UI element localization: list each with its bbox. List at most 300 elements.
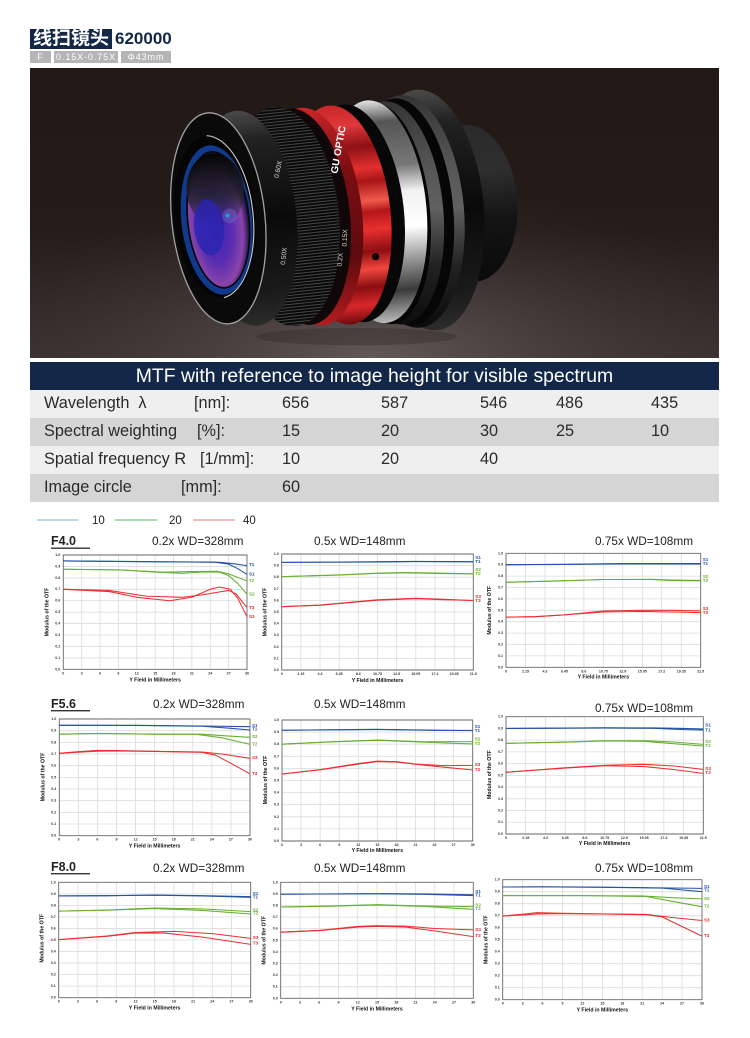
chart: F4.0 0.2x: 12 — [135, 671, 139, 675]
chart: F8.0 0.75x: 12 — [580, 1002, 584, 1006]
table header — [30, 362, 719, 390]
chart: F8.0 0.2x: Modulus of the OTF — [40, 914, 46, 963]
chart: F4.0 0.5x: 6.45 — [336, 672, 343, 676]
heading: F5.6: F5.6 — [51, 697, 76, 711]
chart: F4.0 0.2x: 15 — [153, 671, 157, 675]
chart: F8.0 0.75x: 1.0 — [495, 878, 500, 882]
chart: F4.0 0.5x: T2 — [475, 571, 481, 576]
chart: F5.6 0.5x: 1.0 — [274, 718, 279, 722]
chart: F8.0 0.5x: 0.1 — [273, 985, 278, 989]
chart: F8.0 0.2x: S2 — [253, 908, 259, 913]
chart: F5.6 0.5x: 0.4 — [274, 791, 279, 795]
chart: F5.6 0.2x: 9 — [116, 838, 118, 842]
chart: F5.6 0.2x: 0.9 — [51, 729, 56, 733]
chart: F4.0 0.2x — [44, 553, 255, 683]
chart: F5.6 0.75x: 15.05 — [640, 836, 649, 840]
chart: F4.0 0.75x: 0.3 — [498, 631, 503, 635]
chart: F4.0 0.2x: 6 — [99, 671, 101, 675]
chart: F5.6 0.75x: T2 — [705, 743, 711, 748]
chart: F4.0 0.5x: 0.6 — [274, 598, 279, 602]
chart: F4.0 0.75x: 8.6 — [581, 669, 586, 673]
inner bezel — [166, 131, 264, 302]
chart: F4.0 0.75x: 0.8 — [498, 574, 503, 578]
chart: F5.6 0.2x: Modulus of the OTF — [40, 753, 46, 801]
table: MTF conditions — [30, 362, 719, 502]
row: spatial frequency: 40 — [480, 450, 498, 468]
chart: F8.0 0.5x: 0.6 — [273, 927, 278, 931]
row: spectral weighting — [30, 418, 719, 446]
chart: F5.6 0.5x: 6 — [319, 843, 321, 847]
chart: F5.6 0.5x: 9 — [338, 843, 340, 847]
row: wavelength: [nm]: — [194, 394, 230, 412]
chart: F8.0 0.2x: 30 — [249, 1000, 253, 1004]
chart: F8.0 0.5x: T1 — [475, 892, 481, 897]
chart: F8.0 0.75x: 30 — [700, 1002, 704, 1006]
chart: F4.0 0.5x: 8.6 — [356, 672, 361, 676]
row: spectral weighting: 25 — [556, 422, 574, 440]
chart: F8.0 0.5x: Modulus of the OTF — [262, 916, 268, 965]
chart: F4.0 0.2x: 0.1 — [55, 656, 60, 660]
chart: F5.6 0.75x: 1.0 — [498, 715, 503, 719]
lens shadow — [257, 328, 457, 345]
chart: F5.6 0.2x: 27 — [229, 838, 233, 842]
chart: F4.0 0.75x: 0.5 — [498, 608, 503, 612]
chart: F8.0 0.75x: 6 — [542, 1002, 544, 1006]
chart: F4.0 0.75x: 12.9 — [619, 669, 626, 673]
chart: F8.0 0.75x: T2 — [704, 903, 710, 908]
row: spectral weighting: 15 — [282, 422, 300, 440]
chart title: row 1 col 1: 0.2x WD=328mm — [152, 534, 244, 548]
chart: F5.6 0.75x: 0.7 — [498, 750, 503, 754]
chart: F5.6 0.2x: 0.8 — [51, 740, 56, 744]
rear flange — [326, 85, 494, 338]
chart: F5.6 0.2x: 0.5 — [51, 775, 56, 779]
chart: F5.6 0.75x: 0.8 — [498, 738, 503, 742]
chart: F8.0 0.5x: 1.0 — [273, 880, 278, 884]
heading: F4.0: F4.0 — [51, 534, 76, 548]
row: wavelength: 546 — [480, 394, 507, 412]
chart: F8.0 0.5x: 0 — [280, 1000, 282, 1004]
black gap ring — [293, 99, 415, 327]
chart: F4.0 0.2x: 0.7 — [55, 587, 60, 591]
row: wavelength — [30, 390, 719, 418]
chart: F4.0 0.75x: 4.3 — [542, 669, 547, 673]
chart: F8.0 0.5x: 9 — [337, 1000, 339, 1004]
chart: F4.0 0.5x: 0.7 — [274, 587, 279, 591]
chart: F5.6 0.5x: 0.5 — [274, 778, 279, 782]
chart: F4.0 0.5x: Modulus of the OTF — [263, 588, 269, 636]
chart: F4.0 0.5x: S1 — [475, 555, 481, 560]
chart: F5.6 0.5x: T1 — [475, 728, 481, 733]
tag: mount: F — [37, 52, 44, 62]
chart: F8.0 0.75x: 0 — [502, 1002, 504, 1006]
chart: F5.6 0.2x: T2 — [252, 742, 258, 747]
row: spectral weighting: [%]: — [197, 422, 225, 440]
chart: F8.0 0.5x — [262, 880, 481, 1012]
chart: F5.6 0.2x: Y Field in Millimeters — [129, 844, 181, 850]
row: spectral weighting: 30 — [480, 422, 498, 440]
chart: F4.0 0.75x: S1 — [703, 557, 709, 562]
chart: F4.0 0.2x: 0.8 — [55, 576, 60, 580]
chart: F5.6 0.5x: 30 — [471, 843, 475, 847]
chart: F5.6 0.5x: 18 — [394, 843, 398, 847]
chart: F4.0 0.2x: 9 — [117, 671, 119, 675]
chart: F8.0 0.75x: 0.4 — [495, 950, 500, 954]
chart: F8.0 0.2x: 18 — [172, 1000, 176, 1004]
chart: F5.6 0.2x: 0.3 — [51, 799, 56, 803]
chart title: row 1 col 3: 0.75x WD=108mm — [595, 534, 693, 548]
tag: diameter — [121, 51, 171, 63]
row: spatial frequency: Spatial frequency R — [44, 450, 186, 468]
chart: F4.0 0.2x: S1 — [249, 572, 255, 577]
chart: F8.0 0.75x: 0.3 — [495, 962, 500, 966]
silver ring — [317, 96, 436, 327]
chart: F5.6 0.5x: 0.2 — [274, 815, 279, 819]
chart: F4.0 0.5x: 4.3 — [318, 672, 323, 676]
chart: F4.0 0.2x: 21 — [190, 671, 194, 675]
chart: F4.0 0.5x: 0.2 — [274, 645, 279, 649]
chart: F8.0 0.5x: S3 — [475, 927, 481, 932]
chart: F4.0 0.5x: S3 — [475, 594, 481, 599]
chart: F8.0 0.75x: 9 — [561, 1002, 563, 1006]
chart: F5.6 0.5x: 12 — [356, 843, 360, 847]
row: image circle: [mm]: — [181, 478, 222, 496]
chart title: row 3 col 2: 0.5x WD=148mm — [314, 861, 406, 875]
legend — [37, 515, 256, 527]
chart: F5.6 0.2x: 15 — [153, 838, 157, 842]
chart: F4.0 0.5x: 0.0 — [274, 668, 279, 672]
chart: F5.6 0.2x: 18 — [172, 838, 176, 842]
chart: F4.0 0.5x: 1.0 — [274, 552, 279, 556]
chart: F8.0 0.5x: 3 — [299, 1000, 301, 1004]
chart: F4.0 0.5x: 12.9 — [393, 672, 400, 676]
row: spatial frequency: 10 — [282, 450, 300, 468]
chart: F5.6 0.75x: 21.5 — [700, 836, 707, 840]
chart: F8.0 0.2x — [40, 880, 259, 1012]
chart: F5.6 0.5x — [263, 718, 481, 854]
chart: F5.6 0.75x: 6.45 — [562, 836, 569, 840]
chart: F5.6 0.2x: 0 — [58, 838, 60, 842]
chart: F8.0 0.2x: 0.5 — [51, 938, 56, 942]
engraved scale marks: 0.15X — [342, 229, 349, 247]
chart: F8.0 0.2x: 0.9 — [51, 892, 56, 896]
chart: F4.0 0.2x: 0.4 — [55, 622, 60, 626]
chart: F4.0 0.2x: 24 — [208, 671, 212, 675]
chart: F8.0 0.2x: 0.8 — [51, 903, 56, 907]
heading: F4.0 — [51, 534, 90, 549]
chart: F4.0 0.75x: 0.0 — [498, 665, 503, 669]
chart: F5.6 0.2x: 24 — [210, 838, 214, 842]
tag: diameter: Φ43mm — [128, 52, 164, 62]
lens glass — [174, 142, 260, 298]
chart: F4.0 0.5x: 17.2 — [431, 672, 438, 676]
chart: F4.0 0.5x: 0.4 — [274, 622, 279, 626]
chart: F8.0 0.2x: 27 — [230, 1000, 234, 1004]
chart: F4.0 0.75x: Modulus of the OTF — [487, 586, 493, 635]
chart: F8.0 0.5x: Y Field in Millimeters — [351, 1006, 403, 1012]
chart: F8.0 0.5x: 18 — [394, 1000, 398, 1004]
chart: F8.0 0.5x: 27 — [452, 1000, 456, 1004]
chart: F5.6 0.75x: Y Field in Millimeters — [579, 841, 631, 847]
chart: F8.0 0.2x: 12 — [134, 1000, 138, 1004]
chart: F5.6 0.75x: 2.15 — [522, 836, 529, 840]
chart: F5.6 0.2x: S2 — [252, 734, 258, 739]
chart: F4.0 0.2x: Y Field in Millimeters — [129, 677, 181, 683]
chart: F8.0 0.5x: 30 — [471, 1000, 475, 1004]
engraved scale marks: 0.2X — [337, 252, 345, 267]
chart: F8.0 0.2x: 0.2 — [51, 973, 56, 977]
chart: F5.6 0.75x: 12.9 — [621, 836, 628, 840]
chart: F5.6 0.2x: S1 — [252, 723, 258, 728]
scale ring — [239, 103, 361, 330]
chart: F8.0 0.75x: 21 — [640, 1002, 644, 1006]
chart: F4.0 0.5x: Y Field in Millimeters — [352, 678, 403, 684]
chart: F8.0 0.5x: 0.3 — [273, 961, 278, 965]
chart: F4.0 0.75x: T3 — [703, 610, 709, 615]
panel: lens photo — [30, 68, 719, 358]
chart: F4.0 0.5x: 0.3 — [274, 633, 279, 637]
dark red collar — [250, 103, 373, 331]
chart: F4.0 0.2x: 0.2 — [55, 644, 60, 648]
chart: F8.0 0.75x: 15 — [600, 1002, 604, 1006]
chart: F8.0 0.2x: 0 — [58, 1000, 60, 1004]
chart: F4.0 0.2x: 0.9 — [55, 564, 60, 568]
heading: F5.6 — [51, 697, 90, 711]
chart: F5.6 0.2x: 0.7 — [51, 752, 56, 756]
row: wavelength: 587 — [381, 394, 408, 412]
chart: F8.0 0.75x: S3 — [704, 918, 710, 923]
chart: F8.0 0.2x: 1.0 — [51, 880, 56, 884]
chart: F5.6 0.2x: S3 — [252, 755, 258, 760]
legend: 10 — [92, 515, 105, 527]
chart: F5.6 0.5x: T3 — [475, 767, 481, 772]
chart: F4.0 0.75x: S3 — [703, 606, 709, 611]
chart: F4.0 0.2x: 0 — [62, 671, 64, 675]
title — [30, 28, 172, 49]
front barrel — [186, 106, 308, 331]
chart: F8.0 0.2x: T1 — [253, 895, 259, 900]
chart title: row 3 col 3: 0.75x WD=108mm — [595, 861, 693, 875]
chart: F8.0 0.75x: Modulus of the OTF — [484, 915, 490, 964]
chart: F8.0 0.2x: 0.6 — [51, 926, 56, 930]
chart title: row 2 col 3: 0.75x WD=108mm — [595, 701, 693, 715]
chart: F8.0 0.5x: 0.0 — [273, 996, 278, 1000]
chart: F5.6 0.5x: 0.3 — [274, 803, 279, 807]
chart: F4.0 0.2x: T1 — [249, 562, 255, 567]
chart: F8.0 0.2x: 6 — [96, 1000, 98, 1004]
inner bezel highlight — [207, 136, 254, 298]
chart: F4.0 0.75x: 15.05 — [638, 669, 647, 673]
chart: F5.6 0.2x: 0.0 — [51, 834, 56, 838]
chart: F4.0 0.2x: 0.5 — [55, 610, 60, 614]
chart: F8.0 0.5x: 0.7 — [273, 915, 278, 919]
chart: F5.6 0.2x: 1.0 — [51, 717, 56, 721]
chart: F4.0 0.75x: 0.9 — [498, 563, 503, 567]
chart: F4.0 0.5x: 19.35 — [450, 672, 459, 676]
chart: F5.6 0.5x: S2 — [475, 737, 481, 742]
heading: F8.0: F8.0 — [51, 860, 76, 874]
chart: F4.0 0.5x: 0.8 — [274, 575, 279, 579]
chart: F4.0 0.2x: Modulus of the OTF — [44, 588, 50, 636]
chart: F5.6 0.75x: 4.3 — [543, 836, 548, 840]
chart: F8.0 0.75x: 0.9 — [495, 890, 500, 894]
chart: F8.0 0.2x: T2 — [253, 911, 259, 916]
chart: F8.0 0.75x: 0.8 — [495, 902, 500, 906]
chart: F8.0 0.75x: 3 — [522, 1002, 524, 1006]
chart: F4.0 0.5x: T3 — [475, 598, 481, 603]
chart: F5.6 0.5x: 24 — [433, 843, 437, 847]
chart: F8.0 0.75x: 0.0 — [495, 998, 500, 1002]
chart: F5.6 0.2x: 0.6 — [51, 764, 56, 768]
chart: F8.0 0.5x: 0.8 — [273, 903, 278, 907]
chart: F5.6 0.5x: S1 — [475, 724, 481, 729]
chart: F8.0 0.2x: 21 — [191, 1000, 195, 1004]
chart: F5.6 0.5x: T2 — [475, 741, 481, 746]
chart: F5.6 0.5x: S3 — [475, 762, 481, 767]
chart title: row 3 col 1: 0.2x WD=328mm — [153, 861, 245, 875]
chart: F5.6 0.5x: Y Field in Millimeters — [352, 848, 403, 854]
adjustment screw — [372, 253, 379, 260]
row: wavelength: 656 — [282, 394, 309, 412]
chart: F5.6 0.5x: 0.0 — [274, 839, 279, 843]
chart: F4.0 0.75x: Y Field in Millimeters — [578, 674, 629, 680]
row: wavelength: Wavelength λ — [44, 394, 147, 412]
engraved scale marks: 0.60X — [273, 160, 284, 179]
chart: F8.0 0.75x: 0.6 — [495, 926, 500, 930]
chart: F8.0 0.75x: 0.1 — [495, 986, 500, 990]
chart: F5.6 0.2x: 12 — [134, 838, 138, 842]
chart: F4.0 0.2x: S3 — [249, 614, 255, 619]
chart: F5.6 0.75x: S1 — [705, 723, 711, 728]
chart: F5.6 0.75x: T3 — [705, 770, 711, 775]
chart: F5.6 0.75x: 19.35 — [679, 836, 688, 840]
chart: F5.6 0.5x: 21 — [413, 843, 417, 847]
chart: F8.0 0.5x: 6 — [318, 1000, 320, 1004]
chart: F4.0 0.2x: 0.6 — [55, 599, 60, 603]
chart title: row 2 col 1: 0.2x WD=328mm — [153, 697, 245, 711]
chart: F8.0 0.2x: Y Field in Millimeters — [129, 1006, 181, 1012]
chart: F4.0 0.75x: 0 — [505, 669, 507, 673]
chart: F5.6 0.5x: 0.6 — [274, 766, 279, 770]
chart: F8.0 0.5x: S1 — [475, 889, 481, 894]
row: spatial frequency — [30, 446, 719, 474]
brand text: GU OPTIC — [329, 125, 349, 175]
chart: F5.6 0.75x: 0.0 — [498, 832, 503, 836]
chart: F8.0 0.75x: T1 — [704, 888, 710, 893]
chart: F8.0 0.75x: 18 — [620, 1002, 624, 1006]
chart: F4.0 0.75x: 19.35 — [677, 669, 686, 673]
chart: F8.0 0.2x: 0.0 — [51, 996, 56, 1000]
chart: F4.0 0.5x: 21.5 — [470, 672, 477, 676]
row: wavelength: 435 — [651, 394, 678, 412]
chart: F5.6 0.5x: 0 — [281, 843, 283, 847]
chart: F5.6 0.2x: 21 — [191, 838, 195, 842]
legend: 20 — [169, 515, 182, 527]
image background — [30, 68, 719, 358]
chart: F8.0 0.75x: 27 — [680, 1002, 684, 1006]
chart: F8.0 0.2x: 9 — [115, 1000, 117, 1004]
chart: F8.0 0.5x: 12 — [356, 1000, 360, 1004]
chart: F5.6 0.5x: 27 — [452, 843, 456, 847]
chart: F4.0 0.5x: 0 — [281, 672, 283, 676]
chart: F8.0 0.75x: 24 — [660, 1002, 664, 1006]
chart: F4.0 0.75x: T2 — [703, 578, 709, 583]
chart: F4.0 0.5x: 2.15 — [297, 672, 304, 676]
chart: F4.0 0.75x: 0.6 — [498, 597, 503, 601]
chart: F4.0 0.2x: 0.3 — [55, 633, 60, 637]
chart: F5.6 0.75x: Modulus of the OTF — [487, 750, 493, 799]
title: model number: 620000 — [115, 29, 172, 48]
chart: F4.0 0.2x: T2 — [249, 578, 255, 583]
chart: F4.0 0.5x: 0.1 — [274, 656, 279, 660]
chart: F4.0 0.75x: 6.45 — [561, 669, 568, 673]
chart: F4.0 0.2x: 1.0 — [55, 553, 60, 557]
chart: F4.0 0.75x: 1.0 — [498, 551, 503, 555]
chart: F4.0 0.75x: 2.15 — [522, 669, 529, 673]
chart: F5.6 0.75x: 0 — [505, 836, 507, 840]
chart: F5.6 0.5x: 0.7 — [274, 754, 279, 758]
chart: F4.0 0.5x: 0.5 — [274, 610, 279, 614]
title: product type: 线扫镜头 — [33, 28, 109, 49]
chart: F5.6 0.75x: 10.75 — [600, 836, 609, 840]
chart: F8.0 0.2x: 0.4 — [51, 949, 56, 953]
chart: F5.6 0.75x: 0.4 — [498, 785, 503, 789]
chart: F4.0 0.75x: 21.5 — [697, 669, 704, 673]
chart: F4.0 0.5x: 0.9 — [274, 564, 279, 568]
chart: F8.0 0.2x: S1 — [253, 891, 259, 896]
chart: F5.6 0.75x: 17.2 — [660, 836, 667, 840]
chart: F8.0 0.5x: T3 — [475, 933, 481, 938]
chart title: row 2 col 2: 0.5x WD=148mm — [314, 697, 406, 711]
engraved scale marks: 0.50X — [280, 247, 289, 265]
chart: F4.0 0.2x: 18 — [172, 671, 176, 675]
chart: F8.0 0.2x: S3 — [253, 935, 259, 940]
chart: F4.0 0.5x: S2 — [475, 567, 481, 572]
row: wavelength: 486 — [556, 394, 583, 412]
row: spectral weighting: Spectral weighting — [44, 422, 177, 440]
chart: F4.0 0.75x: 0.2 — [498, 642, 503, 646]
table header: MTF with reference to image height for visible spectrum — [136, 365, 613, 387]
red fluted ring — [278, 100, 402, 330]
chart: F5.6 0.5x: 3 — [300, 843, 302, 847]
chart: F5.6 0.75x: 0.9 — [498, 726, 503, 730]
knurled ring — [220, 102, 350, 332]
row: image circle — [30, 474, 719, 502]
tag: magnification: 0.15X-0.75X — [56, 52, 116, 62]
chart: F8.0 0.2x: 24 — [210, 1000, 214, 1004]
chart: F4.0 0.5x: T1 — [475, 559, 481, 564]
tag: mount — [30, 51, 51, 63]
rear barrel — [417, 122, 523, 285]
chart: F5.6 0.5x: 0.8 — [274, 742, 279, 746]
chart: F4.0 0.5x: 15.05 — [411, 672, 420, 676]
chart: F4.0 0.75x: 17.2 — [658, 669, 665, 673]
lens drawing — [161, 85, 523, 345]
chart: F4.0 0.2x: T3 — [249, 605, 255, 610]
row: spectral weighting: 10 — [651, 422, 669, 440]
chart: F5.6 0.2x: 0.2 — [51, 810, 56, 814]
chart: F5.6 0.75x: S2 — [705, 739, 711, 744]
chart: F5.6 0.75x — [487, 715, 711, 847]
chart title: row 1 col 2: 0.5x WD=148mm — [314, 534, 406, 548]
heading: F8.0 — [51, 860, 90, 874]
row: spatial frequency: 20 — [381, 450, 399, 468]
chart: F8.0 0.5x: 24 — [433, 1000, 437, 1004]
chart: F8.0 0.75x: 0.5 — [495, 938, 500, 942]
chart: F4.0 0.75x: 0.7 — [498, 585, 503, 589]
chart: F8.0 0.75x: Y Field in Millimeters — [577, 1008, 628, 1014]
chart: F8.0 0.5x: 0.5 — [273, 938, 278, 942]
